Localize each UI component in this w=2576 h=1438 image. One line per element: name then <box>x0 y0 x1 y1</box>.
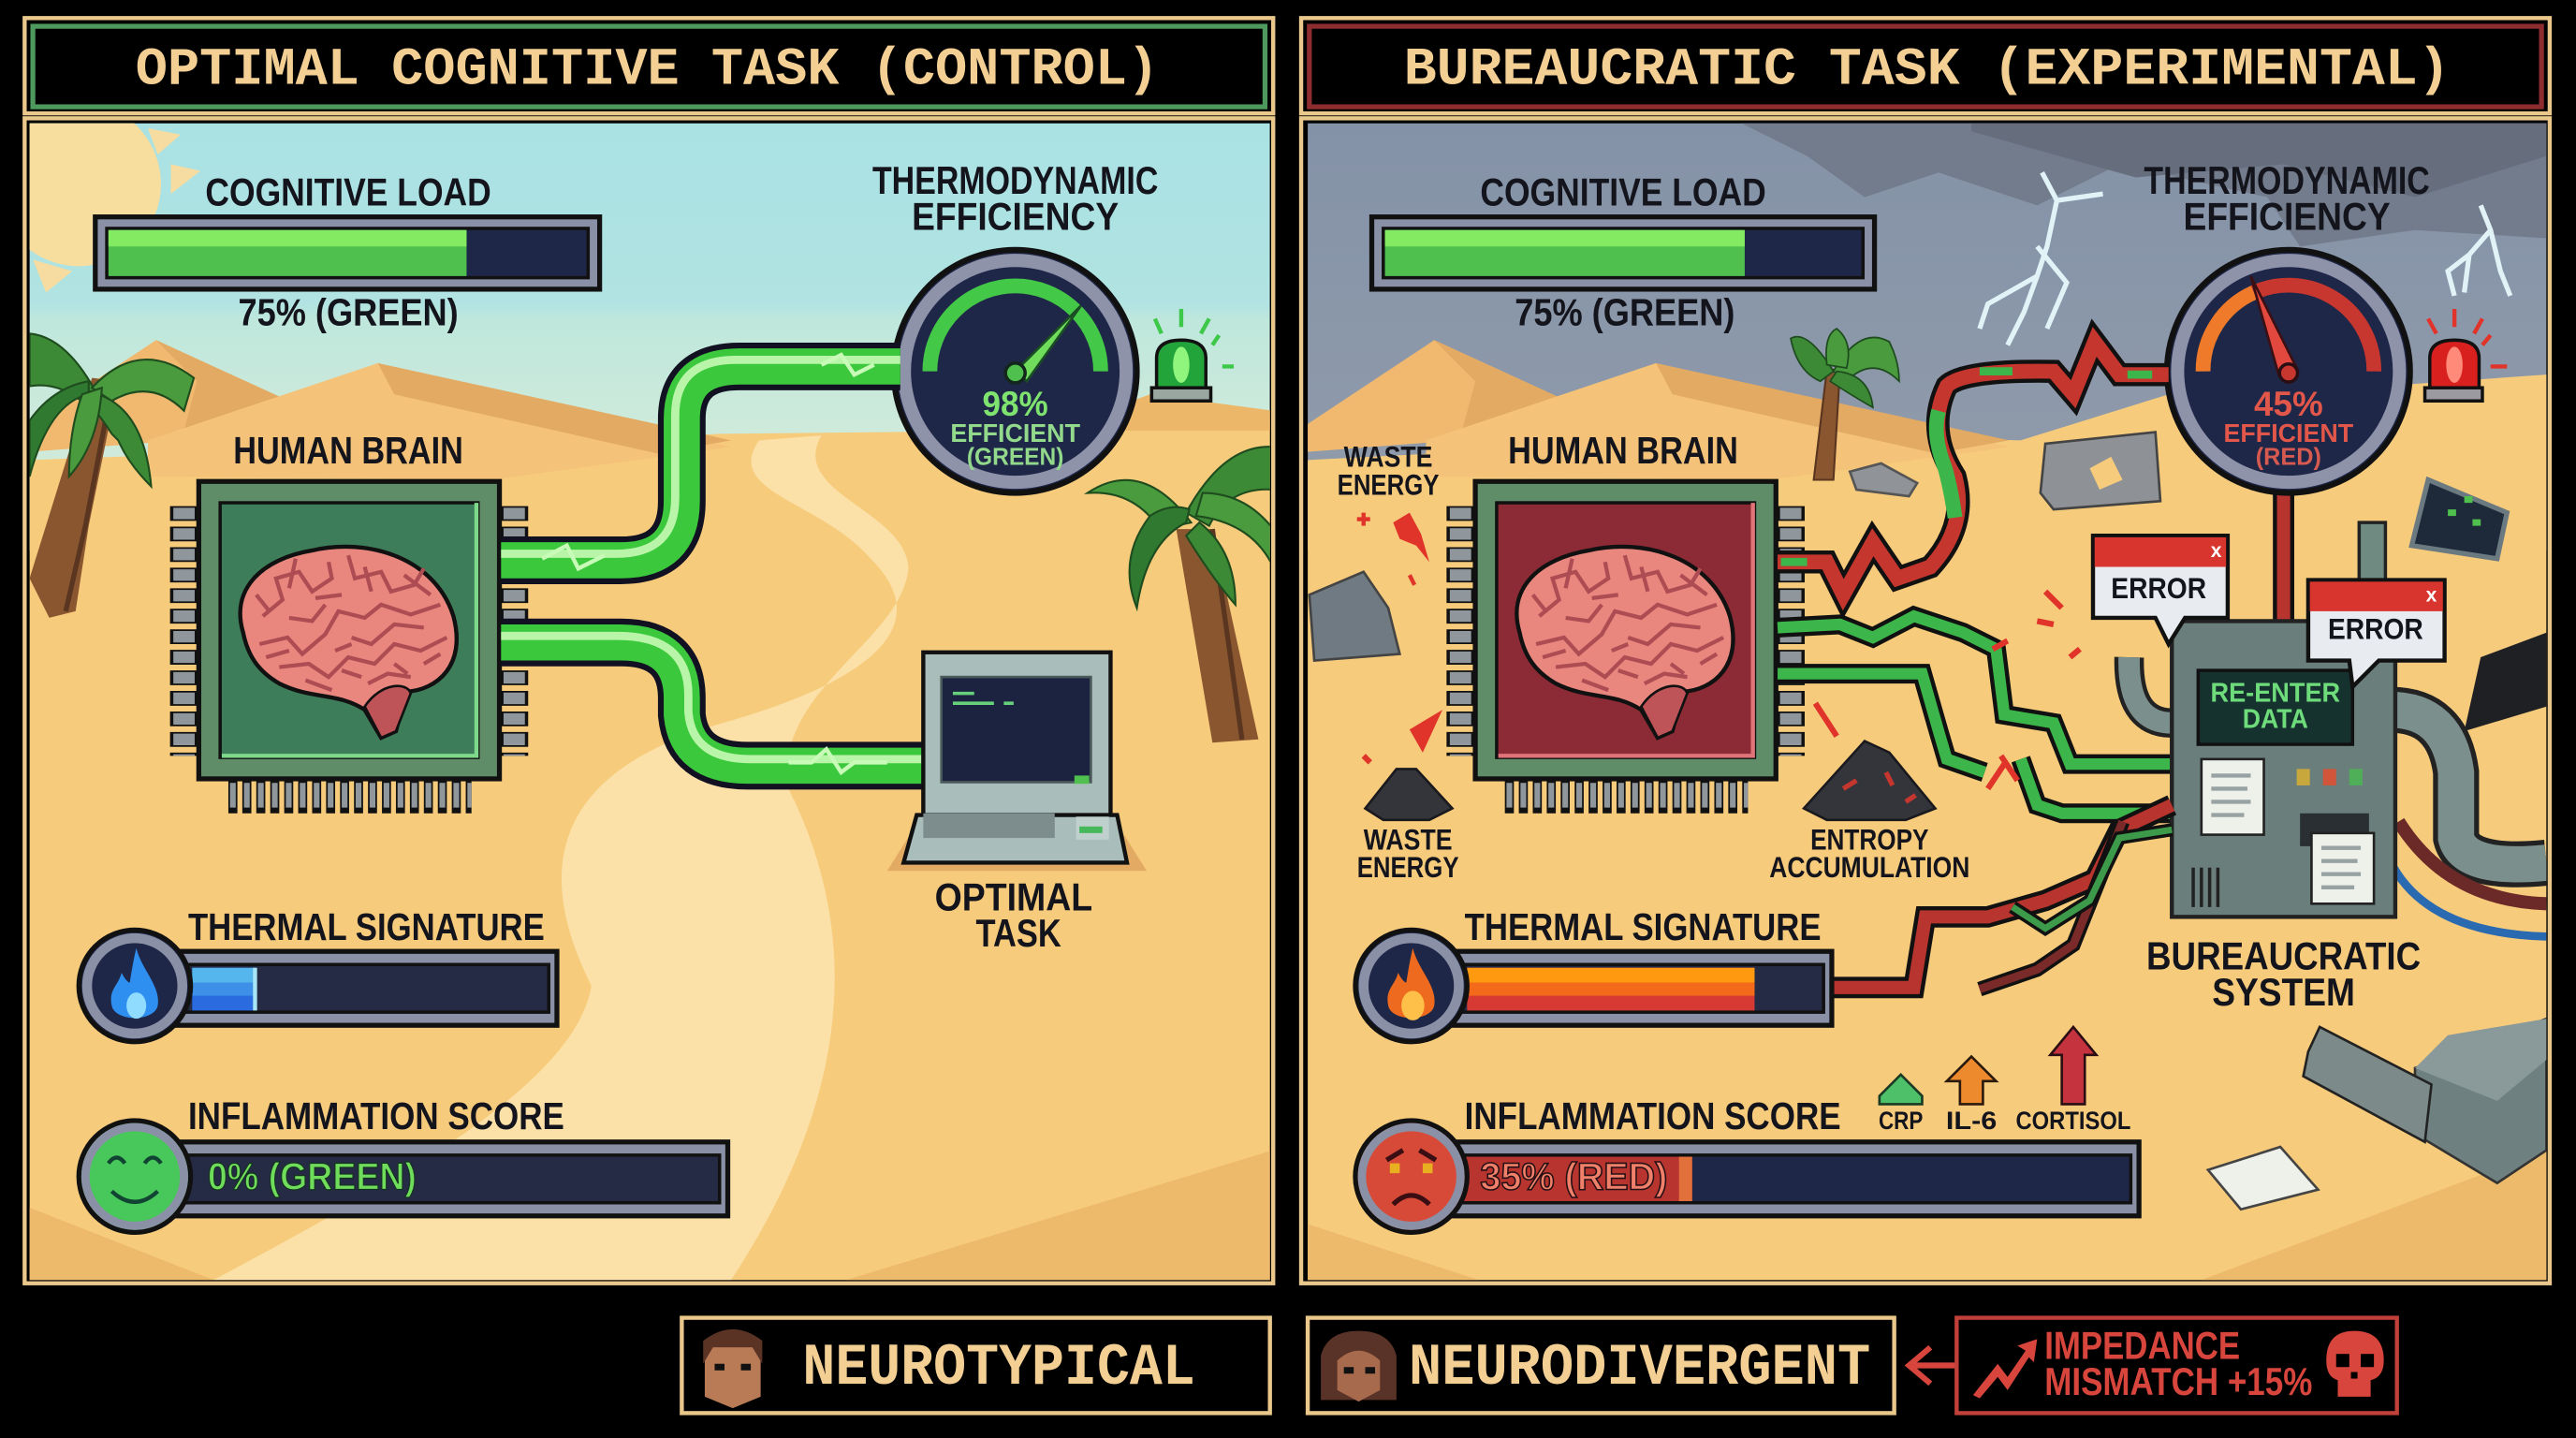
label: entropy accumulation: ACCUMULATION <box>1769 850 1969 884</box>
icon: CRP arrow <box>1880 1075 1922 1104</box>
pipe right <box>2391 710 2546 864</box>
cognitive load meter: COGNITIVE LOAD <box>1480 169 1766 213</box>
thermodynamic efficiency gauge: EFFICIENT <box>2224 418 2353 448</box>
icon: smiling face <box>79 1121 191 1232</box>
icon: orange flame <box>1355 930 1467 1042</box>
cognitive load meter <box>1372 169 1875 334</box>
icon: skull <box>2326 1331 2384 1397</box>
label: waste energy top: ENERGY <box>1338 467 1439 501</box>
error popup 2 <box>2308 580 2445 687</box>
label: waste energy bottom: WASTE <box>1364 822 1453 856</box>
biomarkers CRP, IL-6, cortisol: CRP <box>1879 1106 1923 1135</box>
icon: rising zigzag arrow <box>1973 1339 2037 1399</box>
bureaucratic machine: DATA <box>2243 705 2308 735</box>
faulty wire to gauge <box>1778 342 2169 594</box>
arrow: impedance to neurodivergent <box>1909 1347 1955 1384</box>
red sparks <box>1364 592 2080 788</box>
thermal signature meter: THERMAL SIGNATURE <box>1465 905 1822 948</box>
thermal signature meter: THERMAL SIGNATURE <box>188 905 545 948</box>
experimental title banner <box>1301 18 2550 113</box>
icon: IL-6 arrow <box>1947 1057 1996 1104</box>
palm tree left <box>30 333 194 618</box>
panel: control <box>0 18 1273 1284</box>
inflammation score meter: 35% (RED) <box>1480 1155 1667 1198</box>
small rock <box>1850 463 1917 496</box>
broken monitor <box>2411 479 2507 559</box>
label: optimal task <box>935 874 1092 955</box>
error popup 2: ERROR <box>2328 612 2423 646</box>
biomarkers CRP, IL-6, cortisol: IL-6 <box>1946 1106 1997 1135</box>
thermodynamic efficiency gauge: 45% <box>2254 385 2323 423</box>
cognitive load meter <box>95 169 600 334</box>
lower sand shade <box>1308 1151 2546 1280</box>
error popup 2: x <box>2426 584 2437 606</box>
cognitive load meter: 75% (GREEN) <box>1515 291 1734 334</box>
icon: red alarm <box>2425 309 2507 401</box>
chip with stressed brain <box>1460 481 1791 797</box>
thermodynamic efficiency gauge: THERMODYNAMIC <box>2144 158 2430 202</box>
icon: red spark waste <box>1357 513 1429 585</box>
label: optimal task: OPTIMAL <box>935 874 1092 918</box>
icon: blue flame <box>79 930 191 1042</box>
waste pile small <box>1365 769 1453 820</box>
crumpled paper <box>2208 1147 2318 1210</box>
label: bureaucratic system: SYSTEM <box>2212 970 2355 1014</box>
label: entropy accumulation: ENTROPY <box>1810 822 1928 856</box>
thermodynamic efficiency gauge: 98% <box>983 385 1048 423</box>
experimental desert scene <box>1301 118 2550 1284</box>
legend: neurotypical <box>681 1318 1270 1413</box>
legend: neurodivergent <box>1308 1318 1895 1413</box>
thermodynamic efficiency gauge: (RED) <box>2256 443 2321 471</box>
thermodynamic efficiency gauge: EFFICIENCY <box>2184 195 2391 239</box>
experimental title banner: BUREAUCRATIC TASK (EXPERIMENTAL) <box>1404 40 2451 100</box>
control desert scene <box>0 102 1273 1284</box>
biomarkers CRP, IL-6, cortisol: CORTISOL <box>2016 1106 2130 1135</box>
label: waste energy top: WASTE <box>1344 439 1432 473</box>
road <box>213 435 909 1280</box>
icon: neurotypical face <box>703 1329 762 1408</box>
entropy pile <box>1804 741 1936 820</box>
callout: impedance mismatch: MISMATCH +15% <box>2044 1359 2312 1403</box>
inflammation score meter: INFLAMMATION SCORE <box>1465 1094 1841 1137</box>
inflammation score meter: INFLAMMATION SCORE <box>188 1094 564 1137</box>
legend: neurodivergent: NEURODIVERGENT <box>1409 1334 1870 1401</box>
thermal signature meter <box>1355 905 1832 1042</box>
error popup 1: x <box>2211 540 2222 562</box>
bureaucratic machine: RE-ENTER <box>2210 678 2340 708</box>
icon: worried face <box>1355 1121 1467 1232</box>
chip with brain <box>184 481 514 797</box>
inflammation score meter <box>79 1094 728 1232</box>
callout: impedance mismatch <box>1956 1318 2397 1413</box>
legend: neurotypical: NEUROTYPICAL <box>802 1334 1195 1401</box>
icon: red arrow to waste <box>1410 710 1442 753</box>
sun <box>30 124 200 292</box>
error popup 1: ERROR <box>2111 571 2206 605</box>
discarded printer <box>2304 1019 2546 1183</box>
thermodynamic efficiency gauge: (GREEN) <box>967 443 1063 471</box>
control title banner <box>24 18 1273 113</box>
label: waste energy top <box>1338 439 1439 501</box>
label: waste energy bottom <box>1357 822 1459 884</box>
palm tree small <box>1791 329 1899 479</box>
label: entropy accumulation <box>1769 822 1969 884</box>
computer: optimal task <box>887 653 1147 871</box>
thermal signature meter <box>79 905 557 1042</box>
thermodynamic efficiency gauge: THERMODYNAMIC <box>872 158 1158 202</box>
green wires to machine <box>1778 616 2172 814</box>
label: human brain: HUMAN BRAIN <box>1508 429 1738 472</box>
cognitive load meter: COGNITIVE LOAD <box>205 169 491 213</box>
label: bureaucratic system <box>2146 934 2421 1014</box>
panel: experimental <box>1301 18 2550 1284</box>
pipe: brain to gauge <box>501 355 900 568</box>
rock left <box>1310 572 1399 661</box>
thermodynamic efficiency gauge: EFFICIENT <box>950 418 1080 448</box>
icon: cortisol arrow <box>2050 1027 2097 1104</box>
error popup 1 <box>2093 536 2228 644</box>
label: human brain: HUMAN BRAIN <box>233 429 463 472</box>
inflammation score meter: 0% (GREEN) <box>208 1155 417 1198</box>
cognitive load meter: 75% (GREEN) <box>238 291 459 334</box>
label: optimal task: TASK <box>976 911 1061 955</box>
callout: impedance mismatch: IMPEDANCE <box>2044 1323 2240 1367</box>
icon: green alarm <box>1151 309 1234 401</box>
thermal wire <box>1832 805 2172 990</box>
faulty wire into machine <box>2277 493 2290 624</box>
biomarkers CRP, IL-6, cortisol <box>1879 1027 2130 1135</box>
label: bureaucratic system: BUREAUCRATIC <box>2146 934 2421 978</box>
debris right <box>2465 633 2546 731</box>
thermodynamic efficiency gauge <box>2144 158 2430 493</box>
icon: neurodivergent face <box>1321 1331 1397 1401</box>
label: waste energy bottom: ENERGY <box>1357 850 1459 884</box>
thermodynamic efficiency gauge: EFFICIENCY <box>912 195 1119 239</box>
ruined wall <box>2041 433 2160 509</box>
bureaucratic machine <box>2130 522 2395 917</box>
pipe: brain to task <box>501 636 927 772</box>
thermodynamic efficiency gauge <box>872 158 1158 493</box>
lightning bolts <box>1980 172 2510 345</box>
control title banner: OPTIMAL COGNITIVE TASK (CONTROL) <box>136 40 1159 100</box>
inflammation score meter <box>1355 1094 2139 1232</box>
storm clouds <box>1741 124 2546 246</box>
palm tree right <box>1088 447 1273 742</box>
